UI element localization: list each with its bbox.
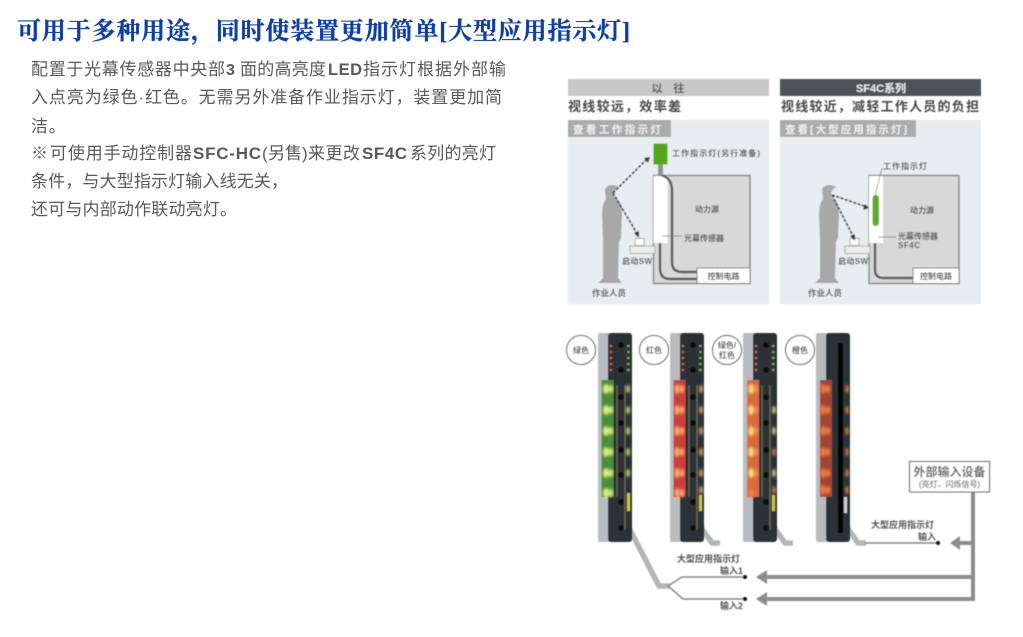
labels: conventional: 作业人员 — [592, 288, 627, 298]
body text: 条件，与大型指示灯输入线无关， — [31, 172, 288, 191]
label circle: red — [640, 336, 668, 364]
body text: ) — [302, 144, 308, 163]
label circle: orange — [786, 336, 814, 364]
header bar: SF4C: SF4C系列 — [856, 81, 906, 95]
wire labels — [677, 519, 936, 611]
body text: 系列的亮灯 — [410, 144, 496, 163]
body text: 可使用手动控制器 — [50, 143, 192, 163]
sensor: red — [640, 333, 704, 542]
cables — [660, 175, 698, 279]
label circle: green/red: 绿色/ — [718, 340, 737, 350]
header bar: conventional: 以 往 — [652, 81, 684, 95]
wire labels: 输入1 — [720, 565, 743, 576]
body text: 配置于光幕传感器中央部 — [31, 60, 225, 79]
start switch — [845, 238, 870, 254]
body text: 入点亮为绿色·红色。无需另外准备作业指示灯，装置更加简 — [31, 88, 502, 107]
body text: 3 — [226, 62, 235, 79]
body text: 还可与内部动作联动亮灯。 — [31, 200, 237, 219]
labels: SF4C: 光幕传感器 — [898, 231, 938, 241]
header bar: conventional — [568, 79, 769, 96]
labels: SF4C: 作业人员 — [808, 288, 843, 298]
wire labels: 输入2 — [720, 600, 743, 611]
body text: ※ — [31, 144, 48, 163]
arrows — [756, 536, 960, 606]
header bar: SF4C — [780, 79, 981, 96]
control circuit box — [913, 268, 959, 284]
body text: 另售 — [268, 144, 302, 163]
power unit box — [654, 176, 750, 284]
labels: SF4C: 动力源 — [910, 205, 934, 215]
labels: SF4C: SF4C — [898, 241, 920, 250]
label: view indicator — [568, 120, 671, 137]
control circuit box: 控制电路 — [920, 271, 952, 281]
body text: 面的高亮度 — [240, 60, 326, 79]
wire labels: 大型应用指示灯 — [677, 553, 740, 564]
labels: SF4C — [808, 161, 938, 298]
body text: 洁。 — [31, 117, 67, 136]
worker silhouette — [598, 185, 622, 283]
labels: conventional — [592, 148, 760, 298]
work indicator lamp — [654, 144, 668, 175]
heading: SF4C: 视线较近，减轻工作人员的负担 — [781, 99, 979, 114]
labels: conventional: 工作指示灯(另行准备) — [672, 148, 760, 158]
body text: 来更改 — [308, 144, 360, 163]
body text: LED — [328, 61, 362, 79]
label circle: red: 红色 — [646, 345, 662, 355]
external input device box — [910, 462, 990, 492]
sight lines — [832, 195, 867, 238]
input wires — [668, 543, 938, 599]
external input device box: (亮灯、闪烁信号) — [919, 479, 980, 489]
sensor: green/red — [712, 333, 777, 542]
sight lines — [613, 158, 648, 235]
external input device box: 外部输入设备 — [913, 464, 986, 479]
label: view large indicator: 查看[大型应用指示灯] — [785, 123, 907, 136]
wire labels: 输入 — [918, 531, 936, 542]
wire labels: 大型应用指示灯 — [871, 519, 934, 530]
label circle: orange: 橙色 — [792, 345, 808, 355]
sensor: orange — [786, 333, 850, 542]
panel: SF4C — [780, 79, 981, 304]
labels: conventional: 动力源 — [695, 204, 719, 214]
label circle: green: 绿色 — [573, 345, 589, 355]
label circle: green/red — [712, 336, 742, 364]
trunk lines — [766, 492, 973, 599]
panel: conventional — [568, 79, 769, 304]
control circuit box: 控制电路 — [708, 271, 740, 281]
large indicator — [872, 195, 879, 226]
labels: SF4C: 启动SW — [838, 256, 868, 266]
power unit box — [869, 176, 959, 284]
body text: ( — [262, 144, 268, 163]
diagram background — [780, 120, 981, 304]
label circle: green — [566, 336, 596, 364]
body text: SFC-HC — [193, 144, 261, 163]
sensor: green — [566, 333, 632, 542]
body text — [31, 60, 506, 219]
labels: conventional: 启动SW — [622, 256, 652, 266]
light curtain sensor — [654, 176, 668, 243]
worker silhouette — [815, 185, 839, 283]
label: view indicator: 查看工作指示灯 — [573, 123, 662, 136]
label circle: green/red: 红色 — [719, 350, 735, 360]
labels: SF4C: 工作指示灯 — [883, 161, 927, 171]
light curtain sensor — [869, 176, 883, 243]
diagram background — [568, 120, 769, 304]
heading: conventional: 视线较远，效率差 — [568, 99, 681, 114]
wiring — [628, 462, 990, 611]
body text: 指示灯根据外部输 — [363, 60, 506, 79]
cable — [875, 243, 914, 278]
control circuit box — [697, 268, 750, 284]
start switch — [630, 238, 655, 254]
body text: SF4C — [362, 144, 407, 163]
title: 可用于多种用途，同时使装置更加简单[大型应用指示灯] — [17, 17, 630, 45]
sensor cables — [628, 526, 670, 586]
label: view large indicator — [780, 120, 916, 137]
labels: conventional: 光幕传感器 — [684, 233, 724, 243]
